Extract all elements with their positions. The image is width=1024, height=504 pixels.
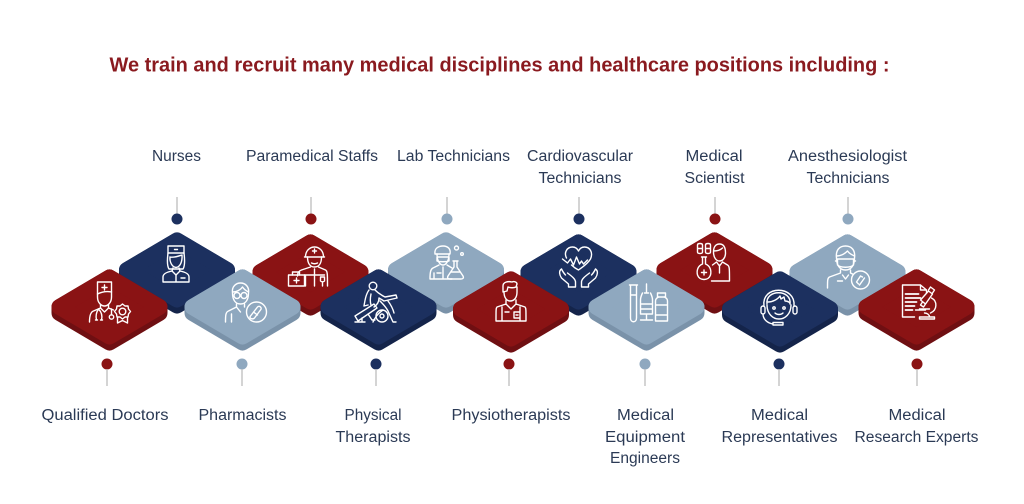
label and pin: Medical Equipment Engineers [605,358,686,467]
label and pin: Qualified Doctors [42,358,169,424]
label and pin: Medical Representatives: Representatives [722,429,838,446]
tile: Qualified Doctors [60,278,160,342]
label and pin: Medical Equipment Engineers: Equipment [605,429,686,446]
tile: Medical Research Experts [866,278,966,342]
tile: Pharmacists [192,278,292,342]
title: We train and recruit many medical disciplines and healthcare positions including : [110,54,890,76]
label and pin: Pharmacists [198,358,287,424]
label and pin: Anesthesiologist Technicians [788,148,908,224]
label and pin: Cardiovascular Technicians [527,148,633,224]
label and pin: Medical Equipment Engineers: Medical [617,407,674,424]
label and pin: Anesthesiologist Technicians: Technicians [806,170,890,187]
tile: Medical Scientist [664,240,764,306]
label and pin: Cardiovascular Technicians: Technicians [538,170,622,187]
tile: Paramedical Staffs [260,242,360,308]
label and pin: Medical Scientist: Scientist [684,170,745,187]
tile: Medical Equipment Engineers [596,278,696,342]
icon: document and microscope [902,285,936,319]
icon: paramedic [288,247,328,286]
tile: Anesthesiologist Technicians [798,242,898,308]
label and pin: Medical Research Experts: Research Experts [854,429,979,446]
tile: Medical Representatives [730,280,830,344]
label and pin: Cardiovascular Technicians: Cardiovascular [527,148,633,165]
label and pin: Physical Therapists [336,358,411,446]
tile: Physiotherapists [461,280,561,344]
label and pin: Physical Therapists: Physical [344,407,402,424]
label and pin: Medical Representatives [722,358,838,446]
tile: Physical Therapists [328,278,428,342]
icon: test tube, syringe and vial [630,284,668,322]
tile: Lab Technicians [396,240,496,306]
label and pin: Lab Technicians [397,148,510,224]
label and pin: Physiotherapists [452,358,571,424]
label and pin: Physiotherapists: Physiotherapists [452,407,571,424]
icon: anesthesiologist [828,246,870,289]
label and pin: Medical Research Experts [854,358,979,446]
label and pin: Medical Equipment Engineers: Engineers [610,450,680,467]
icon: physical therapist with patient [355,282,397,322]
label and pin: Medical Scientist: Medical [686,148,742,165]
icon: nurse [163,246,189,282]
label and pin: Medical Scientist [684,148,745,224]
label and pin: Paramedical Staffs: Paramedical Staffs [246,148,378,165]
label and pin: Physical Therapists: Therapists [336,429,411,446]
label and pin: Nurses: Nurses [152,148,201,165]
tile: Cardiovascular Technicians [528,242,628,308]
icon: pharmacist with pill [226,283,266,322]
label and pin: Medical Research Experts: Medical [888,407,946,424]
icon: heart in hands [560,247,597,287]
icon: physiotherapist [496,282,526,321]
label and pin: Qualified Doctors: Qualified Doctors [42,407,169,424]
label and pin: Medical Representatives: Medical [751,407,808,424]
label and pin: Nurses [152,148,201,224]
icon: doctor with award [90,282,130,323]
label and pin: Lab Technicians: Lab Technicians [397,148,510,165]
label and pin: Pharmacists: Pharmacists [198,407,287,424]
icon: lab technician [430,246,463,279]
label and pin: Anesthesiologist Technicians: Anesthesiologist [788,148,908,165]
tile: Nurses [127,240,227,306]
label and pin: Paramedical Staffs [246,148,378,224]
icon: headset agent [761,290,797,325]
icon: medical scientist [697,244,730,281]
